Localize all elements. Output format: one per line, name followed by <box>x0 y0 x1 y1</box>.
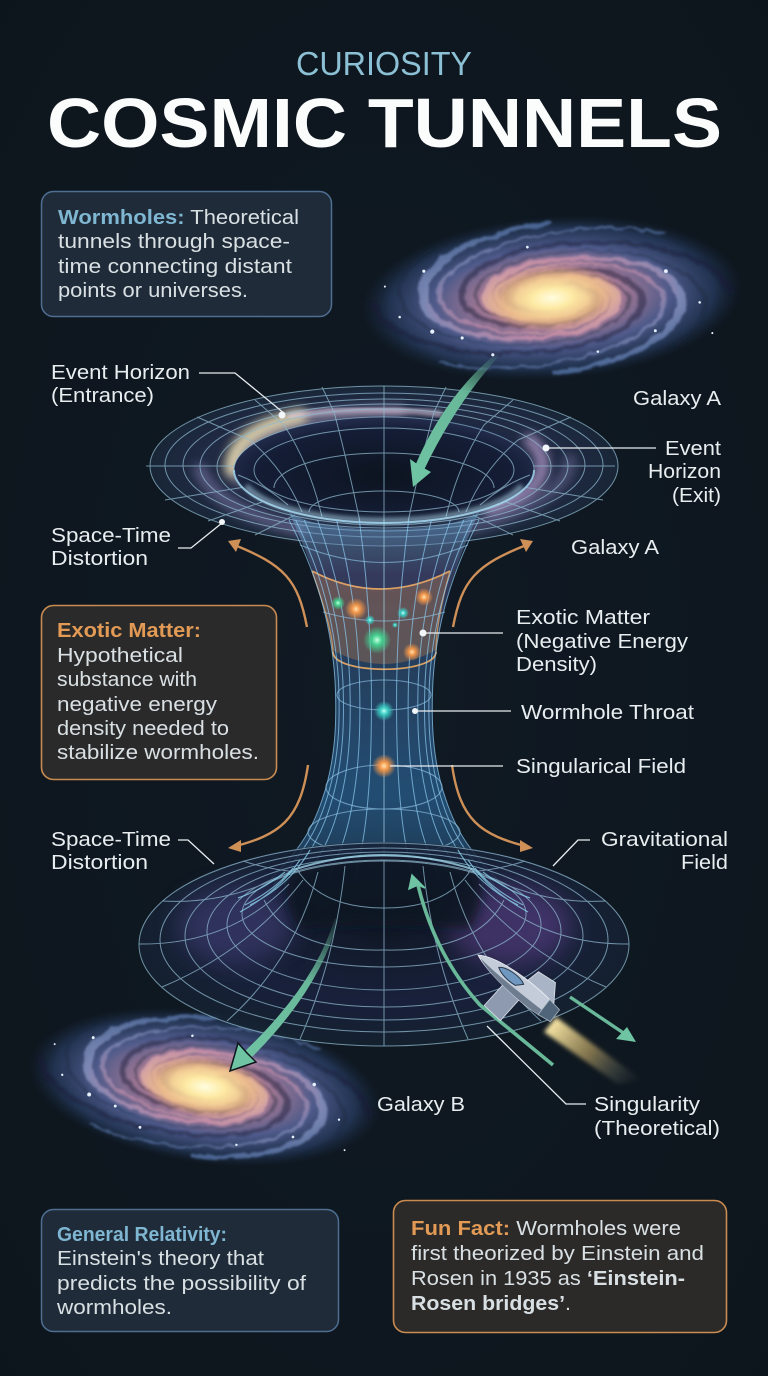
arrow: orange upper left <box>228 539 307 627</box>
label: space-time distortion lower: Space-Time <box>51 828 171 851</box>
label: gravitational field: Field <box>681 851 728 874</box>
arrow: green up into throat <box>409 875 553 1065</box>
label: galaxy B: Galaxy B <box>377 1093 465 1116</box>
galaxy B <box>0 974 414 1200</box>
label: wormhole throat: Wormhole Throat <box>521 701 694 724</box>
flare highlights <box>238 850 530 912</box>
tube rings <box>300 545 468 855</box>
heading: cosmic tunnels: COSMIC TUNNELS <box>47 84 722 162</box>
leader: singularical field <box>390 765 503 767</box>
panel: general relativity: wormholes. <box>56 1296 172 1319</box>
panel: general relativity: General Relativity: <box>57 1223 227 1246</box>
leader: gravitational field <box>553 840 590 866</box>
bottom funnel disc <box>139 842 629 1046</box>
arrow: green into top funnel <box>410 353 499 487</box>
panel: exotic matter: density needed to <box>57 717 229 740</box>
panel: wormholes: time connecting distant <box>58 255 292 278</box>
label: event horizon entrance <box>51 361 190 407</box>
label: singularical field: Singularical Field <box>516 755 686 778</box>
arrow: orange lower right <box>452 765 533 852</box>
title <box>47 45 722 162</box>
panel: exotic matter: substance with <box>57 668 197 691</box>
label: space-time distortion upper: Space-Time <box>51 524 171 547</box>
label: galaxy A upper: Galaxy A <box>633 387 721 410</box>
label: exotic matter <box>516 606 689 676</box>
panel: wormholes: Wormholes: Theoretical <box>58 206 299 229</box>
label: space-time distortion lower <box>51 828 171 874</box>
panel: exotic matter: stabilize wormholes. <box>57 741 259 764</box>
panel: exotic matter: Hypothetical <box>57 644 183 667</box>
throat opening <box>234 417 534 523</box>
wormhole tube <box>265 512 503 885</box>
leader: event horizon entrance <box>199 373 286 418</box>
label: gravitational field <box>601 828 728 874</box>
leader: exotic matter <box>420 630 503 636</box>
label: space-time distortion lower: Distortion <box>51 851 148 874</box>
panel: fun fact <box>394 1200 726 1332</box>
matter glows <box>345 598 367 620</box>
label: exotic matter: Exotic Matter <box>516 606 650 629</box>
top funnel disc <box>146 386 618 546</box>
label: event horizon exit <box>648 437 721 507</box>
panel: wormholes <box>42 192 332 316</box>
arrow: orange upper right <box>453 539 533 627</box>
eyebrow: curiosity: CURIOSITY <box>296 45 472 82</box>
leader: event horizon exit <box>542 444 656 452</box>
panel: general relativity: Einstein's theory that <box>57 1247 264 1270</box>
label: space-time distortion upper: Distortion <box>51 547 148 570</box>
galaxy band on the event horizon <box>200 410 570 530</box>
label: space-time distortion upper <box>51 524 171 570</box>
tube meridians <box>265 520 503 885</box>
leader: wormhole throat <box>412 708 511 714</box>
panel: fun fact: Rosen bridges’ . <box>411 1292 571 1315</box>
galaxy A <box>333 191 768 405</box>
panel: wormholes: tunnels through space- <box>58 230 290 253</box>
label: exotic matter: (Negative Energy <box>516 630 689 653</box>
exotic matter band <box>312 571 450 664</box>
label: galaxy A lower: Galaxy A <box>571 536 659 559</box>
label: singularity <box>594 1093 720 1140</box>
label: event horizon entrance: Event Horizon <box>51 361 190 384</box>
panel: exotic matter: Exotic Matter: <box>57 619 201 642</box>
label: gravitational field: Gravitational <box>601 828 728 851</box>
panel: general relativity <box>42 1210 338 1332</box>
panel: fun fact: Rosen in 1935 as ‘Einstein- <box>411 1267 685 1290</box>
arrow: green departing right <box>570 997 636 1042</box>
label: event horizon entrance: (Entrance) <box>51 384 154 407</box>
leader: space-time distortion lower <box>178 840 214 864</box>
label: singularity: Singularity <box>594 1093 701 1116</box>
label: exotic matter: Density) <box>516 653 597 676</box>
panel: fun fact: Fun Fact: Wormholes were <box>411 1217 681 1240</box>
label: singularity: (Theoretical) <box>594 1117 720 1140</box>
arrow: green out to galaxy B <box>230 918 338 1071</box>
panel: general relativity: predicts the possibility of <box>57 1272 306 1295</box>
label: event horizon exit: Horizon <box>648 460 721 483</box>
panel: exotic matter <box>42 606 276 780</box>
arrow: orange lower left <box>228 765 308 852</box>
leader: space-time distortion upper <box>178 519 225 548</box>
leader: singularity <box>487 1026 586 1104</box>
label: event horizon exit: (Exit) <box>672 484 721 507</box>
panel: exotic matter: negative energy <box>57 693 218 716</box>
label: event horizon exit: Event <box>665 437 721 460</box>
panel: wormholes: points or universes. <box>58 279 248 302</box>
panel: fun fact: first theorized by Einstein and <box>411 1242 704 1265</box>
bright lip <box>234 470 534 523</box>
icon: spaceship <box>455 935 642 1084</box>
